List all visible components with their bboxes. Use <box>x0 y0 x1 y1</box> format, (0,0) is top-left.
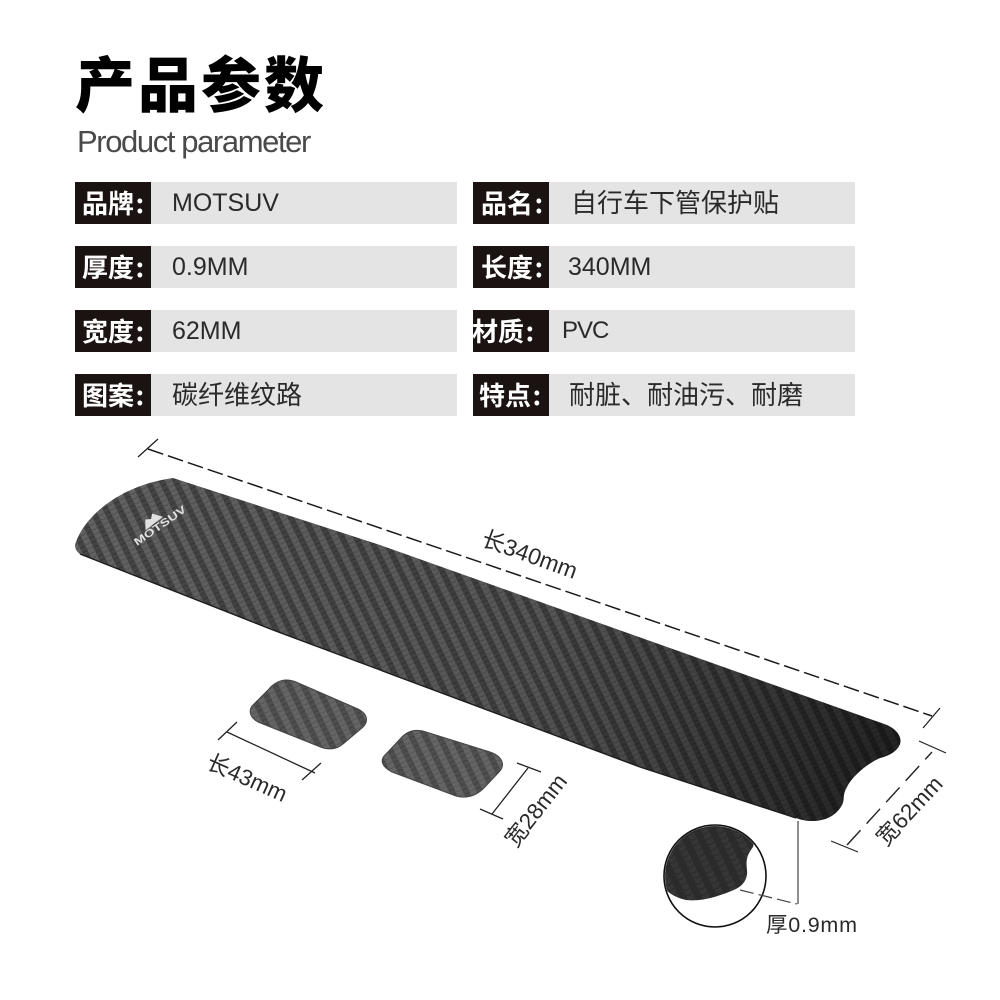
length label: 长340mm <box>478 525 581 584</box>
spec row: pattern: 碳纤维纹路 <box>172 380 302 410</box>
title: 产品参数 <box>75 38 327 125</box>
spec row: product name: 自行车下管保护贴 <box>571 188 779 218</box>
width dimension line <box>831 741 946 852</box>
spec row: pattern <box>75 374 457 416</box>
patch width label: 宽28mm <box>500 769 572 852</box>
spec row: brand: MOTSUV <box>172 189 279 217</box>
spec row: pattern: 图案 : <box>82 376 144 413</box>
spec row: thickness <box>75 246 457 288</box>
spec row: brand <box>75 182 457 224</box>
spec row: material: PVC <box>562 317 608 344</box>
spec row: product name <box>473 182 855 224</box>
spec row: features: 耐脏、耐油污、耐磨 <box>569 380 803 410</box>
spec row: thickness: 厚度 : <box>82 248 144 285</box>
product diagram <box>75 438 946 934</box>
small patch right <box>382 730 502 797</box>
spec row: width <box>75 310 457 352</box>
spec row: product name: 品名 : <box>481 184 543 221</box>
spec row: thickness: 0.9MM <box>172 253 248 281</box>
width label: 宽62mm <box>871 771 948 850</box>
spec row: brand: 品牌 : <box>82 184 144 221</box>
spec row: material: 材质 : <box>472 312 534 349</box>
patch width dimension <box>480 763 541 819</box>
brand logo on strip <box>127 496 189 548</box>
spec row: width: 62MM <box>172 317 241 345</box>
spec row: length <box>473 246 855 288</box>
patch length label: 长43mm <box>203 749 291 807</box>
length dimension line <box>138 439 940 728</box>
brand logo on strip: MOTSUV <box>132 504 189 548</box>
small patch left <box>250 680 367 749</box>
spec row: width: 宽度 : <box>82 312 144 349</box>
magnified thickness inset <box>663 824 767 928</box>
spec row: length: 长度 : <box>481 248 543 285</box>
subtitle: Product parameter <box>77 124 310 159</box>
spec row: length: 340MM <box>568 253 651 281</box>
spec row: features: 特点 : <box>479 376 541 413</box>
thickness leader lines <box>740 821 798 904</box>
carbon fibre main strip <box>75 478 900 821</box>
thickness label: 厚0.9mm <box>766 913 857 937</box>
spec row: features <box>473 374 855 416</box>
spec row: material <box>473 310 855 352</box>
patch length dimension <box>218 722 321 780</box>
